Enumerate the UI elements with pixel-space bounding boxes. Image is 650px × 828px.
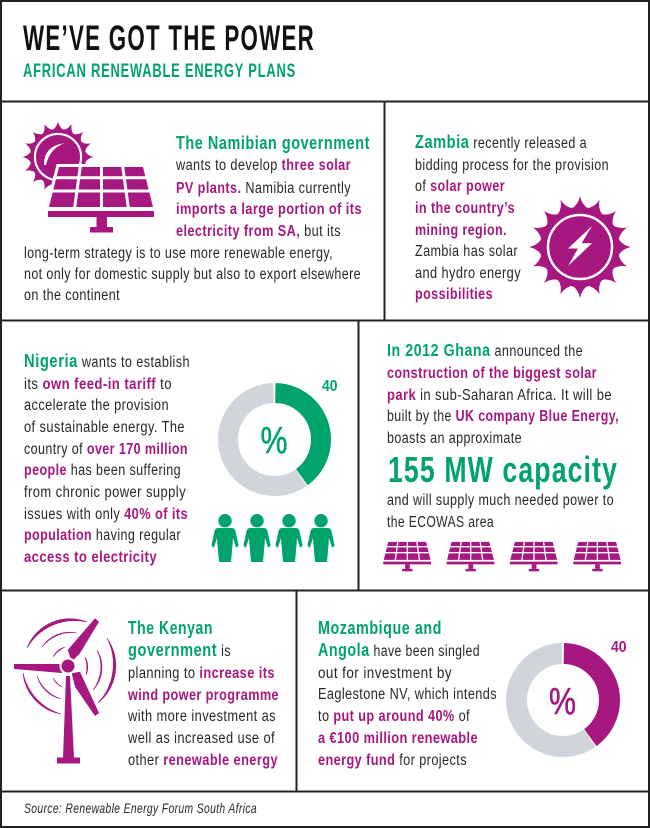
- text: Mozambique and Angola: [318, 618, 497, 769]
- text: Nigeria: Nigeria wants to establish: [24, 351, 190, 371]
- text: Ghana: construction of the biggest solar: [387, 365, 597, 382]
- text: Ghana continued: the ECOWAS area: [387, 514, 494, 531]
- donut chart: 40 percent: 40: [611, 639, 627, 656]
- text: Kenya: planning to increase its: [128, 665, 275, 682]
- text: Nigeria: its own feed-in tariff to: [24, 376, 172, 393]
- icon: four people: [212, 514, 334, 562]
- donut chart: 40 percent: 40: [322, 378, 338, 395]
- text: Zambia: [415, 132, 609, 303]
- text: Namibia: not only for domestic supply but also to export elsewhere: [24, 266, 361, 283]
- text: Nigeria: people has been suffering: [24, 462, 181, 479]
- text: Namibia: [24, 133, 370, 304]
- text: Zambia: possibilities: [415, 286, 493, 303]
- icon: four solar panels: [383, 541, 621, 571]
- source note: Source: Renewable Energy Forum South Africa: [24, 800, 257, 816]
- panel: Nigeria: [24, 351, 338, 566]
- title: WE’VE GOT THE POWER: [23, 19, 315, 58]
- text: Zambia: of solar power: [415, 178, 505, 195]
- text: Zambia: in the country’s: [415, 200, 515, 217]
- text: Namibia: imports a large portion of its: [176, 201, 362, 218]
- panel: Ghana: [383, 340, 621, 571]
- text: Mozambique and Angola: Angola have been singled: [318, 640, 480, 660]
- text: Nigeria: accelerate the provision: [24, 397, 169, 414]
- text: Nigeria: of sustainable energy. The: [24, 419, 185, 436]
- text: Kenya: other renewable energy: [128, 752, 278, 769]
- text: Namibia: electricity from SA, but its: [176, 223, 341, 240]
- header: [23, 19, 315, 82]
- text: Mozambique and Angola: a €100 million renewable: [318, 730, 478, 747]
- text: Zambia: mining region.: [415, 222, 507, 239]
- donut chart: 40 percent: [228, 378, 338, 486]
- text: Namibia: long-term strategy is to use more renewable energy,: [24, 245, 333, 262]
- text: Nigeria: population having regular: [24, 527, 181, 544]
- text: Zambia: and hydro energy: [415, 265, 521, 282]
- panel: Mozambique and Angola: [318, 618, 627, 769]
- text: Mozambique and Angola: energy fund for projects: [318, 752, 467, 769]
- donut chart: 40 percent: %: [549, 681, 576, 723]
- text: Mozambique and Angola: out for investment by: [318, 665, 452, 682]
- icon: sun and solar panel: [22, 121, 154, 232]
- text: Ghana continued: [387, 492, 614, 531]
- text: Nigeria: from chronic power supply: [24, 484, 186, 501]
- panel: Zambia: [415, 132, 631, 303]
- icon: wind turbine: [14, 618, 116, 764]
- text: Namibia: PV plants. Namibia currently: [176, 180, 351, 197]
- text: Namibia: The Namibian government: [176, 133, 370, 153]
- text: Kenya: The Kenyan: [128, 618, 213, 638]
- text: Mozambique and Angola: Mozambique and: [318, 618, 442, 638]
- subtitle: AFRICAN RENEWABLE ENERGY PLANS: [23, 60, 296, 82]
- text: Mozambique and Angola: Eaglestone NV, which intends: [318, 686, 497, 703]
- text: Namibia: on the continent: [24, 287, 120, 304]
- text: Kenya: with more investment as: [127, 708, 276, 725]
- text: Namibia: wants to develop three solar: [175, 157, 351, 174]
- donut chart: 40 percent: [516, 639, 627, 746]
- text: Ghana: In 2012 Ghana announced the: [387, 340, 583, 360]
- text: Nigeria: issues with only 40% of its: [24, 506, 188, 523]
- text: Nigeria: [24, 351, 190, 566]
- text: Kenya: wind power programme: [127, 687, 279, 704]
- text: Nigeria: access to electricity: [24, 549, 157, 566]
- text: Kenya: government is: [128, 640, 231, 660]
- text: Zambia: bidding process for the provision: [415, 157, 609, 174]
- text: Nigeria: country of over 170 million: [24, 441, 188, 458]
- text: Ghana: boasts an approximate: [387, 430, 522, 447]
- text: Ghana: park in sub-Saharan Africa. It will be: [387, 387, 612, 404]
- text: Zambia: Zambia recently released a: [415, 132, 587, 152]
- text: Kenya: well as increased use of: [127, 730, 275, 747]
- text: Kenya: [127, 618, 279, 769]
- icon: sun with lightning bolt: [529, 196, 631, 298]
- panel: Kenya: [14, 618, 279, 769]
- text: Ghana: [387, 340, 619, 447]
- text: Mozambique and Angola: to put up around 40% of: [318, 708, 470, 725]
- donut chart: 40 percent: %: [260, 420, 288, 462]
- text: Zambia: Zambia has solar: [415, 243, 518, 260]
- panel: Namibia: [22, 121, 370, 304]
